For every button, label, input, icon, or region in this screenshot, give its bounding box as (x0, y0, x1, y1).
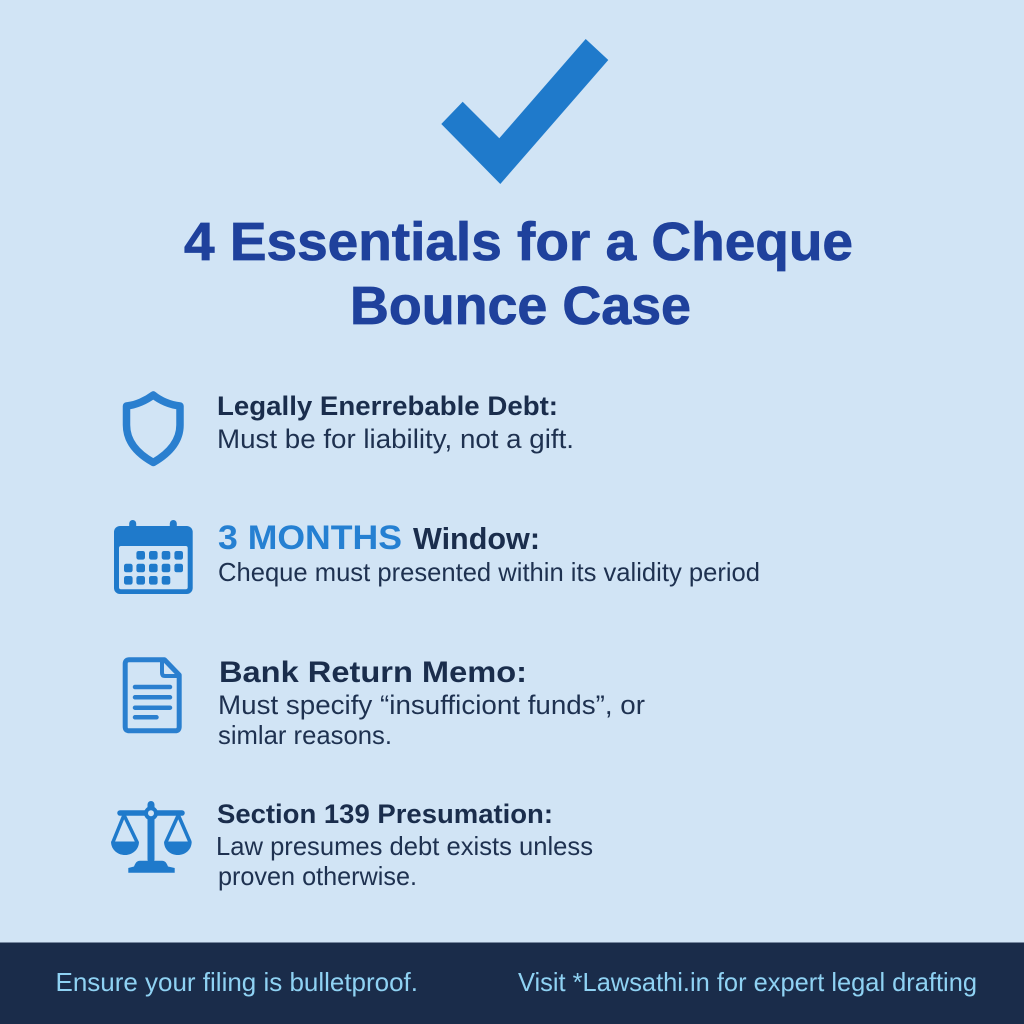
heading: window: Window: (413, 521, 540, 556)
title (184, 212, 853, 336)
panel: legally enforceable debt (126, 391, 574, 462)
text: presumption description (216, 831, 593, 891)
icon: scales of justice (111, 801, 192, 873)
heading: debt: Legally Enerrebable Debt: (217, 391, 558, 421)
text: memo description (218, 690, 645, 750)
text: memo description: Must specify “insufficiont funds”, or (218, 690, 645, 720)
heading: window: 3 MONTHS (218, 519, 402, 557)
panel: section 139 (111, 799, 593, 891)
icon: shield (126, 395, 180, 462)
text: window description: Cheque must presented within its validity period (218, 557, 760, 587)
text: memo description: simlar reasons. (218, 720, 392, 750)
icon: check mark (441, 39, 608, 184)
footer band (0, 942, 1024, 1024)
panel: bank return memo (125, 656, 645, 750)
text: presumption description: proven otherwise. (218, 861, 417, 891)
text: debt description: Must be for liability, not a gift. (217, 424, 574, 454)
panel: 3 months window (114, 519, 760, 594)
icon: calendar (114, 520, 193, 594)
text: presumption description: Law presumes debt exists unless (216, 831, 593, 861)
footer text: call to action: Visit *Lawsathi.in for expert legal drafting (518, 967, 977, 997)
title: Bounce Case (350, 276, 691, 336)
heading: presumption: Section 139 Presumation: (217, 799, 553, 829)
heading: memo: Bank Return Memo: (219, 656, 527, 689)
icon: document (125, 659, 179, 731)
title: 4 Essentials for a Cheque (184, 212, 853, 272)
footer text: tagline: Ensure your filing is bulletproof. (56, 967, 418, 997)
heading: window (218, 519, 540, 557)
